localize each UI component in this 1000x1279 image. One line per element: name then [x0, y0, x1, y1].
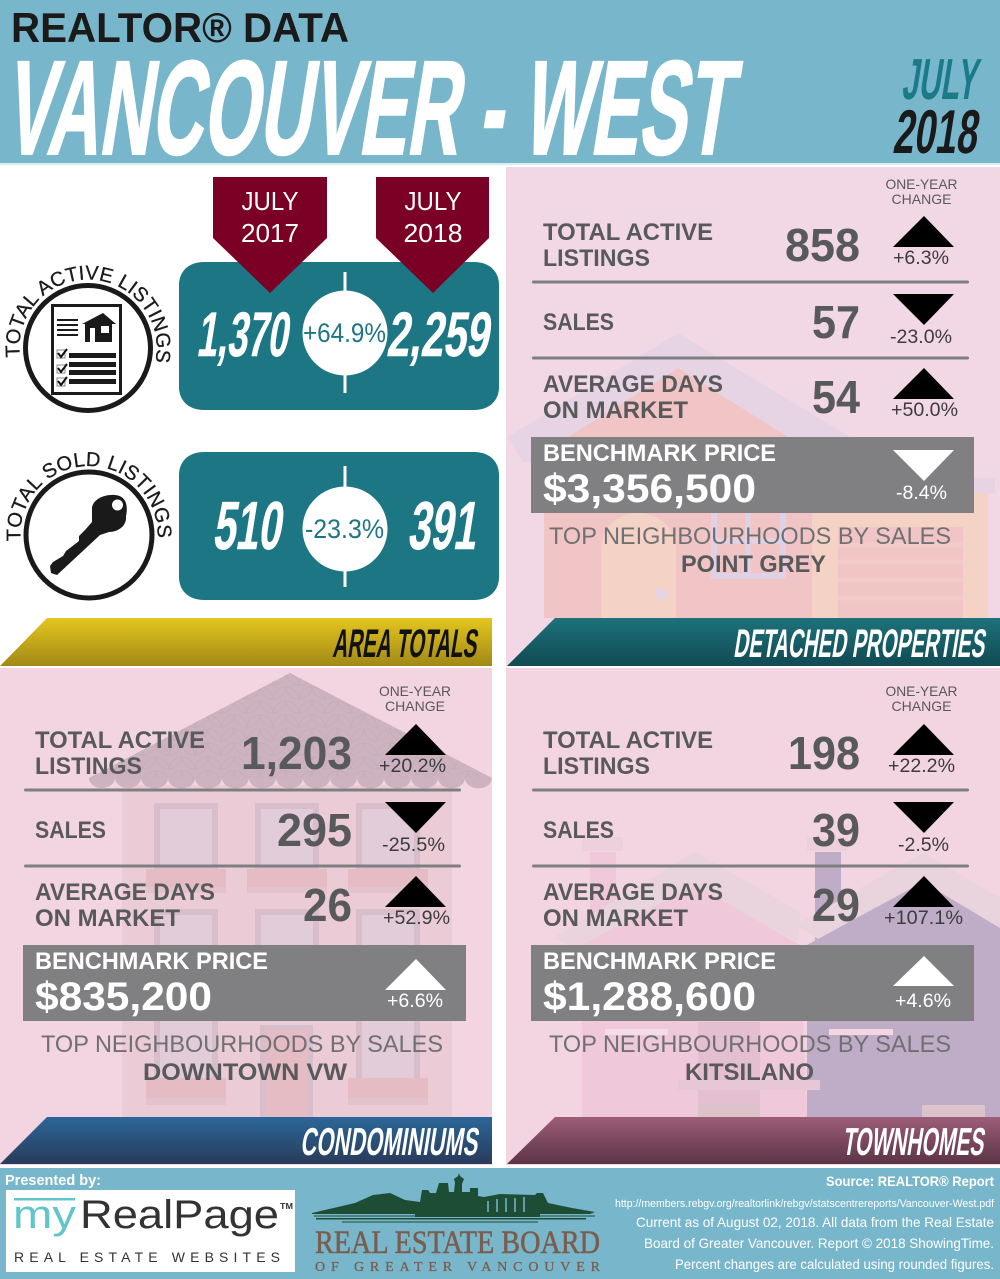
row: average days on market: AVERAGE DAYS	[543, 879, 723, 906]
benchmark price box: -8.4%	[896, 483, 947, 504]
row: average days on market: ON MARKET	[543, 397, 688, 424]
column heading: one-year change	[886, 176, 958, 207]
row: sales: -25.5%	[382, 835, 445, 856]
logo: myrealpage: REAL ESTATE WEBSITES	[14, 1249, 280, 1265]
presented by label: Presented by:	[5, 1172, 101, 1189]
header band	[0, 0, 1000, 183]
row: average days on market	[543, 368, 958, 424]
row: sales: 295	[277, 804, 352, 856]
row: average days on market: 54	[812, 371, 860, 423]
row: sales	[543, 802, 954, 856]
flag: july 2018	[376, 177, 489, 293]
row: total active listings: +6.3%	[893, 248, 949, 269]
top neighbourhoods	[41, 1031, 443, 1086]
top neighbourhoods	[549, 1031, 951, 1086]
column heading: one-year change: CHANGE	[892, 698, 952, 714]
row: sales	[543, 294, 954, 348]
top neighbourhoods	[549, 523, 951, 578]
row: total active listings: TOTAL ACTIVE	[35, 727, 205, 754]
row: total active listings: 1,203	[241, 727, 352, 779]
column heading: one-year change: ONE-YEAR	[886, 683, 958, 699]
row: total active listings: 198	[788, 727, 860, 779]
top neighbourhoods: POINT GREY	[681, 551, 826, 578]
row: sales: 39	[812, 804, 860, 856]
panel: area totals	[0, 177, 499, 666]
row: average days on market: +50.0%	[891, 400, 958, 421]
column heading: one-year change	[886, 683, 958, 714]
column heading: one-year change: ONE-YEAR	[886, 176, 958, 192]
top neighbourhoods: TOP NEIGHBOURHOODS BY SALES	[549, 1031, 951, 1058]
panel: detached properties	[506, 167, 1000, 666]
banner: area totals	[0, 618, 492, 666]
sold value 2017: 510	[210, 488, 290, 564]
row: average days on market: +107.1%	[884, 908, 963, 929]
background house: detached	[508, 333, 995, 618]
logo: myrealpage: my	[13, 1193, 76, 1237]
active listings arc label: TOTAL ACTIVE LISTINGS	[5, 265, 170, 362]
logo: real estate board	[312, 1173, 601, 1275]
row: total active listings: +22.2%	[888, 756, 955, 777]
row: total active listings: +20.2%	[379, 756, 446, 777]
banner: detached properties	[507, 618, 1000, 666]
top neighbourhoods: TOP NEIGHBOURHOODS BY SALES	[549, 523, 951, 550]
percent change: +64.9%	[303, 318, 386, 348]
logo: myrealpage	[6, 1190, 295, 1272]
row: total active listings: TOTAL ACTIVE	[543, 727, 713, 754]
row: sales: -23.0%	[890, 327, 952, 348]
sold listings arc label: TOTAL SOLD LISTINGS	[6, 452, 172, 541]
logo: myrealpage: TM	[280, 1202, 293, 1211]
row: total active listings: 858	[785, 219, 860, 271]
source text: Board of Greater Vancouver. Report © 2018 ShowingTime.	[644, 1235, 994, 1251]
flag: july 2017: JULY	[242, 186, 298, 216]
row: sales: SALES	[543, 817, 614, 844]
column heading: one-year change: ONE-YEAR	[379, 683, 451, 699]
row: average days on market: AVERAGE DAYS	[35, 879, 215, 906]
row: sales	[35, 802, 446, 856]
sold listings stat box	[179, 452, 499, 600]
benchmark price box	[531, 437, 974, 513]
row: average days on market	[543, 876, 963, 932]
row: total active listings: TOTAL ACTIVE	[543, 219, 713, 246]
benchmark price box: $1,288,600	[543, 975, 756, 1019]
row: average days on market	[35, 876, 450, 932]
logo: real estate board: OF GREATER VANCOUVER	[315, 1260, 601, 1275]
row: sales: SALES	[35, 817, 106, 844]
heading: realtor data: REALTOR® DATA	[11, 4, 349, 51]
benchmark price box: BENCHMARK PRICE	[543, 440, 776, 467]
sold percent change: -23.3%	[305, 514, 384, 544]
row: average days on market: 29	[812, 879, 860, 931]
active listings stat box	[179, 262, 499, 410]
footer band	[0, 1168, 1000, 1279]
benchmark price box: BENCHMARK PRICE	[35, 948, 268, 975]
flag: july 2018: JULY	[404, 186, 462, 216]
column heading: one-year change	[379, 683, 451, 714]
panel: townhomes	[506, 668, 1000, 1165]
benchmark price box: $835,200	[35, 975, 212, 1019]
benchmark price box	[23, 945, 466, 1021]
flag: july 2018: 2018	[404, 218, 462, 248]
benchmark price box: +6.6%	[387, 991, 443, 1012]
banner: townhomes	[507, 1117, 1000, 1164]
flag: july 2017	[213, 177, 327, 293]
row: sales: SALES	[543, 309, 614, 336]
row: sales: -2.5%	[898, 835, 949, 856]
source text: http://members.rebgv.org/realtorlink/rebgv/statscentrereports/Vancouver-West.pdf	[615, 1198, 995, 1210]
panel: condominiums	[0, 668, 492, 1165]
active listings icon	[26, 286, 150, 410]
source text	[615, 1173, 995, 1272]
banner: area totals: AREA TOTALS	[331, 621, 482, 666]
row: sales: 57	[812, 296, 860, 348]
row: average days on market: 26	[303, 879, 352, 931]
flag: july 2017: 2017	[241, 218, 299, 248]
sold value 2018: 391	[405, 488, 485, 564]
row: average days on market: ON MARKET	[35, 905, 180, 932]
top neighbourhoods: DOWNTOWN VW	[143, 1059, 347, 1086]
background houses: townhomes	[553, 837, 1000, 1117]
row: total active listings	[35, 724, 446, 780]
row: total active listings: LISTINGS	[543, 753, 650, 780]
benchmark price box: $3,356,500	[543, 467, 756, 511]
skyline	[312, 1173, 595, 1222]
row: average days on market: +52.9%	[383, 908, 450, 929]
row: average days on market: AVERAGE DAYS	[543, 371, 723, 398]
benchmark price box: BENCHMARK PRICE	[543, 948, 776, 975]
banner: condominiums	[0, 1117, 492, 1164]
row: total active listings: LISTINGS	[35, 753, 142, 780]
top neighbourhoods: TOP NEIGHBOURHOODS BY SALES	[41, 1031, 443, 1058]
value 2017: 1,370	[194, 300, 296, 370]
value 2018: 2,259	[384, 300, 497, 370]
top neighbourhoods: KITSILANO	[685, 1059, 814, 1086]
logo: myrealpage: RealPage	[80, 1193, 279, 1237]
benchmark price box: +4.6%	[895, 991, 951, 1012]
column heading: one-year change: CHANGE	[892, 191, 952, 207]
row: total active listings: LISTINGS	[543, 245, 650, 272]
benchmark price box	[531, 945, 974, 1021]
row: total active listings	[543, 216, 954, 272]
row: total active listings	[543, 724, 955, 780]
column heading: one-year change: CHANGE	[385, 698, 445, 714]
row: average days on market: ON MARKET	[543, 905, 688, 932]
logo: real estate board: REAL ESTATE BOARD	[315, 1225, 600, 1261]
source text: Current as of August 02, 2018. All data from the Real Estate	[636, 1214, 994, 1230]
sold listings icon	[26, 472, 152, 598]
banner: condominiums: CONDOMINIUMS	[299, 1120, 483, 1164]
background building: condo	[89, 673, 492, 1117]
